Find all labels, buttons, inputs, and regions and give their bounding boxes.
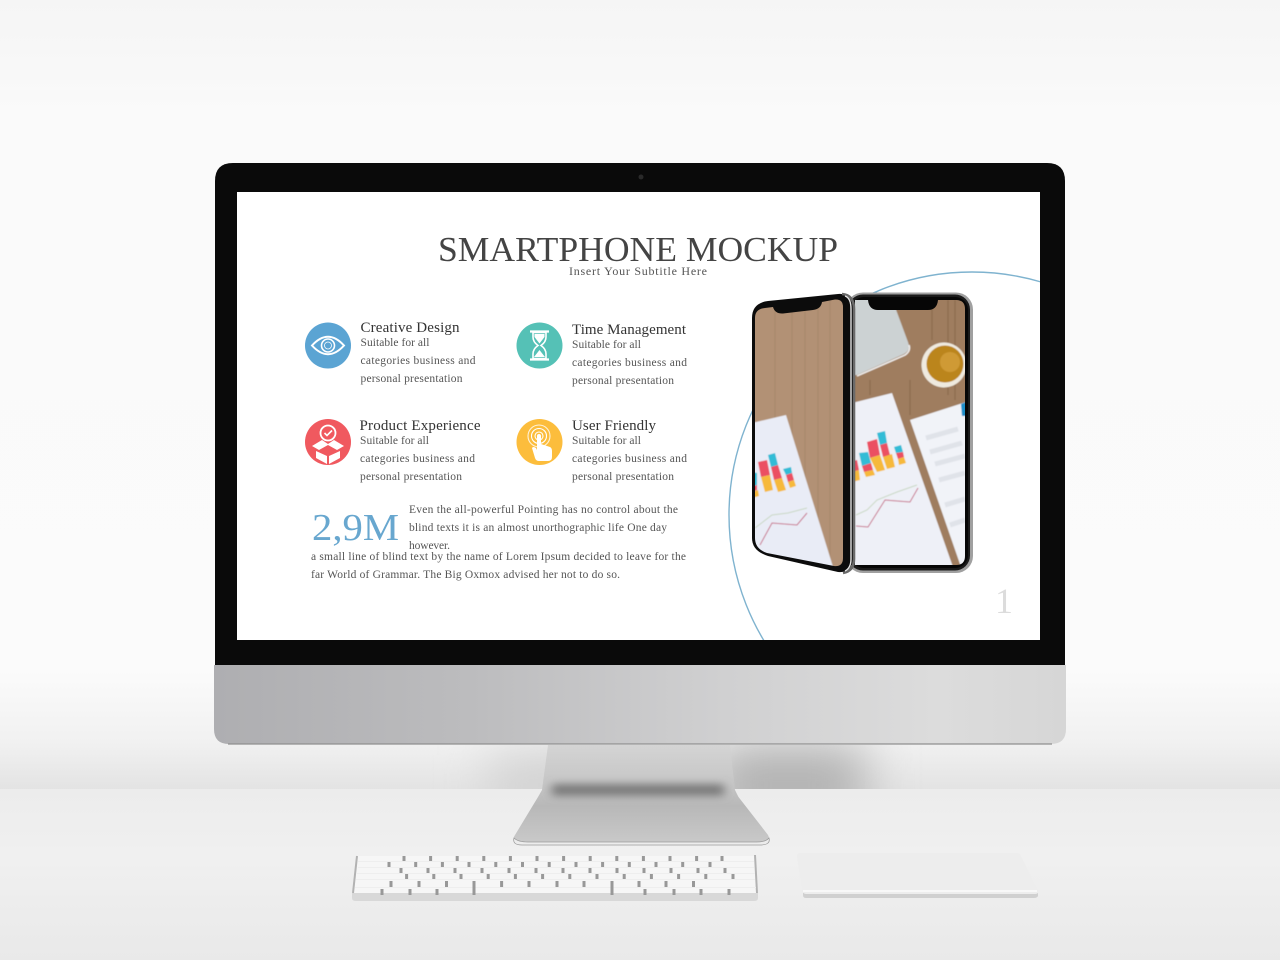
wood background [855,300,965,565]
body text: personal presentation [572,375,674,387]
body text: personal presentation [360,373,463,385]
body text: categories business and [360,453,475,465]
feature: user friendly [516,418,687,483]
feature: time management [516,322,687,387]
body text: personal presentation [572,471,674,483]
report paper left [852,393,953,567]
icon: eye [305,322,351,368]
monitor [214,163,1066,744]
laptop [852,296,909,375]
paragraph [311,504,686,581]
phone: right [846,292,973,573]
heading: User Friendly [572,418,656,434]
icon: box with check [305,419,351,465]
page number: 1 [995,581,1013,621]
body text [360,337,476,385]
body text: personal presentation [360,471,462,483]
monitor stand [505,745,780,847]
bar chart [752,453,796,498]
paragraph: however. [409,540,450,552]
keyboard [352,855,758,901]
line chart [856,488,918,527]
title: SMARTPHONE MOCKUP [438,230,838,269]
monitor chin [214,665,1066,744]
bar chart [852,431,906,482]
body text: categories business and [572,453,687,465]
feature: creative design [305,320,476,385]
subtitle: Insert Your Subtitle Here [569,264,707,278]
body text: categories business and [360,355,476,367]
body text: Suitable for all [360,337,430,349]
icon: hourglass [516,322,562,368]
paragraph: far World of Grammar. The Big Oxmox advised her not to do so. [311,569,620,581]
big stat: 2,9M [312,507,399,549]
wood background [755,300,843,566]
report paper right [910,402,966,567]
body text: Suitable for all [572,435,641,447]
paragraph: a small line of blind text by the name of Lorem Ipsum decided to leave for the [311,551,686,563]
body text: categories business and [572,357,687,369]
heading: Product Experience [360,418,481,434]
coffee cup [922,342,966,388]
decorative circle [728,271,1040,640]
icon: touch hand [516,419,562,465]
slide screen [237,192,1040,640]
body text [572,435,687,483]
stand shadow on wall [490,745,888,789]
monitor bezel [215,163,1065,665]
body text [572,339,687,387]
paragraph: Even the all-powerful Pointing has no control about the [409,504,678,516]
report paper [752,415,834,570]
body text: Suitable for all [360,435,429,447]
paragraph: blind texts it is an almost unorthographic life One day [409,522,667,534]
body text [360,435,475,483]
desk surface [0,789,1280,960]
feature: product experience [305,418,481,483]
webcam [638,174,644,180]
trackpad [797,853,1038,898]
body text: Suitable for all [572,339,641,351]
heading: Creative Design [360,320,460,336]
heading: Time Management [572,322,687,338]
phone: left [752,294,854,575]
line chart [760,513,807,545]
